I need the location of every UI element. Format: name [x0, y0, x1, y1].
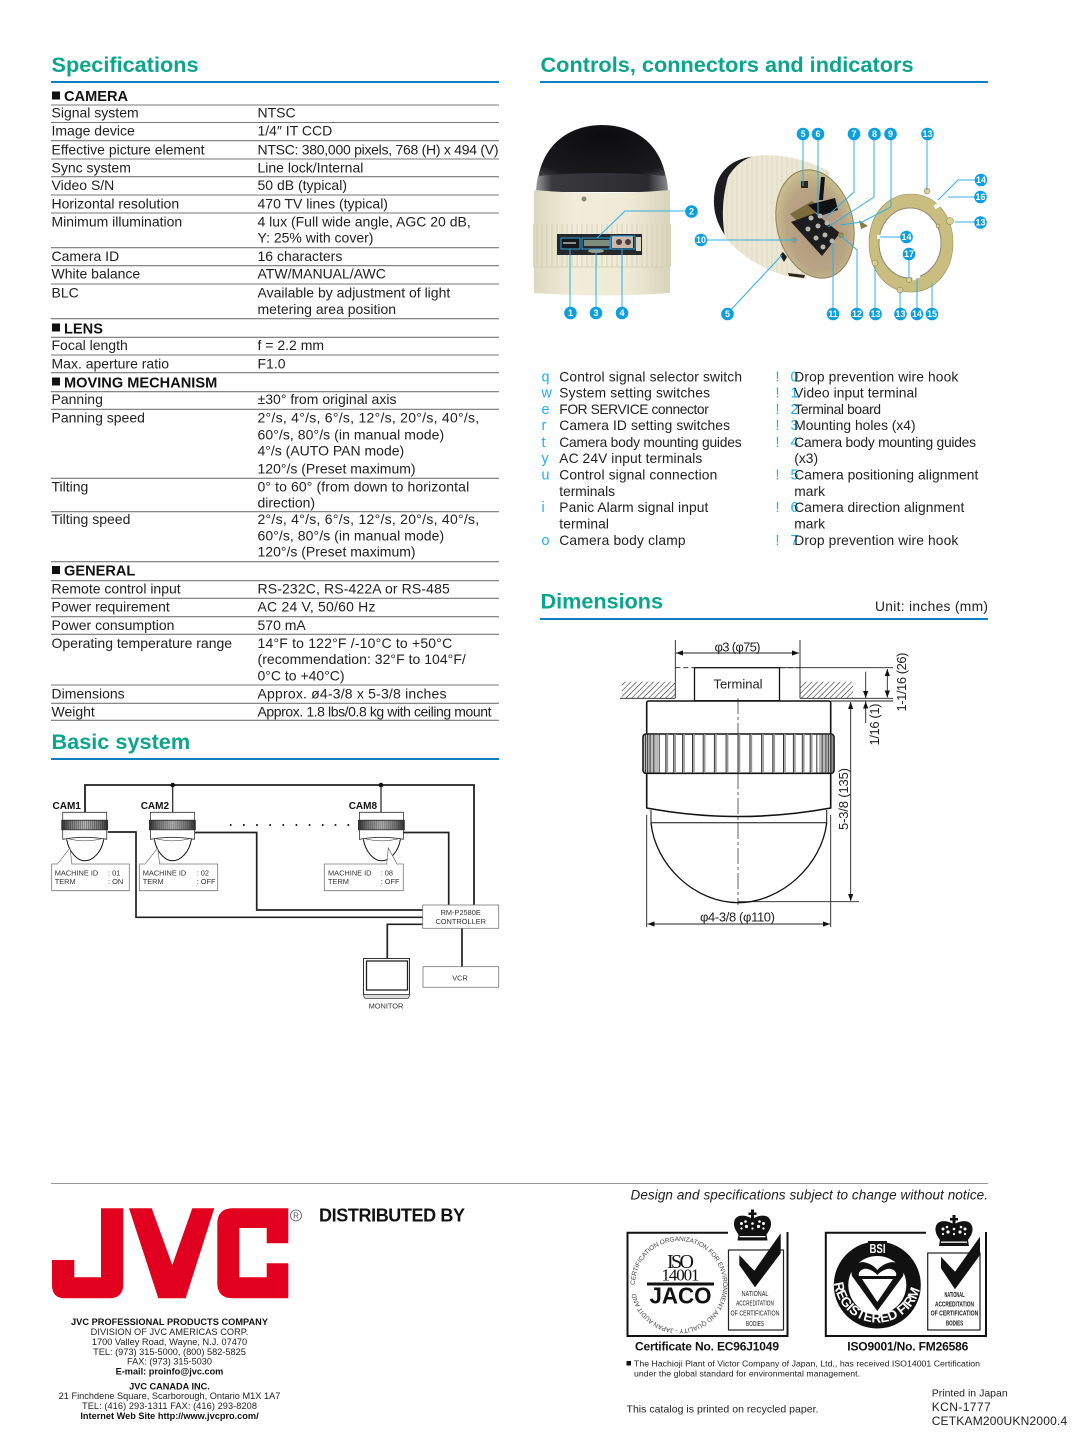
section: camera: metering area position	[258, 301, 396, 317]
section: moving mechanism: Tilting	[52, 479, 88, 495]
info box: camera 1 settings: TERM	[55, 877, 76, 886]
icon: camera 2: CAM2	[141, 801, 169, 812]
section: moving mechanism: 120°/s (Preset maximum)	[258, 544, 416, 560]
text: print codes: CETKAM200UKN2000.4	[932, 1414, 1068, 1428]
legend: right column: Drop prevention wire hook	[794, 533, 958, 548]
heading: Basic system: Basic system	[52, 729, 190, 754]
section: general: 14°F to 122°F /-10°C to +50°C	[258, 635, 452, 651]
badge: ISO 14001: ACCREDITATION	[736, 1300, 774, 1308]
text: addresses	[59, 1317, 280, 1421]
legend: right column: !	[776, 386, 779, 402]
legend: left column: u	[542, 468, 549, 484]
section: camera: 4 lux (Full wide angle, AGC 20 dB,	[258, 214, 471, 230]
legend: right column: mark	[794, 484, 825, 499]
legend: right column: Mounting holes (x4)	[794, 418, 916, 433]
section: camera	[52, 89, 498, 317]
controller box: CONTROLLER	[435, 917, 486, 926]
legend: right column: Video input terminal	[794, 386, 917, 401]
legend: right column: Camera positioning alignment	[794, 468, 978, 483]
section: general: Dimensions	[52, 686, 125, 702]
legend: right column: 0	[790, 370, 798, 386]
section: moving mechanism: Tilting speed	[52, 511, 130, 527]
legend: right column: !	[776, 435, 779, 451]
section: camera: White balance	[52, 265, 140, 281]
info box: camera 2 settings: : 02	[197, 868, 209, 877]
continuation dots	[230, 824, 349, 826]
info box: camera 8 settings: MACHINE ID	[328, 868, 372, 877]
dimension labels	[700, 640, 909, 925]
legend: left column: t	[542, 435, 546, 451]
legend: right column: !	[776, 533, 779, 549]
heading: Dimensions: Unit: inches (mm)	[875, 599, 988, 614]
center line	[737, 698, 739, 905]
info box: camera 2 settings: MACHINE ID	[143, 868, 186, 877]
numbered callouts: 7	[851, 129, 857, 139]
legend: right column: 1	[790, 386, 798, 402]
section: moving mechanism: ±30° from original axis	[258, 391, 396, 407]
legend: right column: 5	[790, 468, 798, 484]
section: camera: 1/4″ IT CCD	[258, 123, 332, 139]
text: certification note	[626, 1359, 980, 1379]
section: moving mechanism: Panning speed	[52, 410, 145, 426]
text: addresses: Internet Web Site http://www.jvcpro.com/	[80, 1411, 259, 1421]
section: general: 0°C to +40°C)	[258, 668, 345, 684]
numbered callouts: 14	[901, 232, 912, 242]
terminal box: Terminal	[713, 676, 763, 692]
vcr box	[423, 967, 499, 987]
heading: Specifications: Specifications	[52, 52, 199, 77]
legend: left column: terminals	[559, 484, 615, 499]
numbered callouts: 1	[568, 308, 573, 318]
numbered callouts: 8	[872, 129, 877, 139]
legend: left column: Camera ID setting switches	[559, 418, 730, 433]
caption: Certificate No. EC96J1049	[635, 1340, 779, 1354]
text: disclaimer: Design and specifications subject to change without notice.	[630, 1188, 988, 1202]
text: addresses: 1700 Valley Road, Wayne, N.J. 07470	[92, 1337, 247, 1347]
icon: monitor	[363, 958, 410, 1010]
legend: right column: 6	[790, 500, 798, 516]
section: camera: 16 characters	[258, 248, 342, 264]
badge: ISO 14001: 14001	[662, 1266, 700, 1284]
section: lens: F1.0	[258, 355, 286, 371]
legend: left column: r	[542, 418, 546, 434]
section: camera: ATW/MANUAL/AWC	[258, 265, 386, 281]
legend: left column: Control signal selector switch	[559, 370, 742, 385]
numbered callouts: 13	[975, 218, 986, 228]
section: general	[52, 564, 492, 720]
badge: ISO 14001: CERTIFICATION ORGANIZATION FOR ENVIRONMENT AND QUALITY - JAPAN AUDIT AND	[630, 1236, 728, 1334]
section: moving mechanism	[52, 375, 479, 560]
section: moving mechanism: Panning	[52, 391, 103, 407]
icon: camera 1	[52, 801, 108, 864]
legend: left column: System setting switches	[559, 386, 710, 401]
terminal box	[694, 668, 780, 701]
legend: right column: mark	[794, 517, 825, 532]
badge: ISO 14001: OF CERTIFICATION	[730, 1310, 780, 1318]
heading: Dimensions: Dimensions	[540, 588, 663, 614]
section: camera: Minimum illumination	[52, 214, 182, 230]
numbered callouts: 13	[895, 309, 906, 319]
legend: right column: 3	[790, 418, 798, 434]
ceiling hatching	[622, 682, 853, 698]
section: general: RS-232C, RS-422A or RS-485	[258, 580, 450, 596]
section: general: Approx. ø4-3/8 x 5-3/8 inches	[258, 686, 446, 702]
section: lens: Focal length	[52, 337, 128, 353]
text: print codes: Printed in Japan	[932, 1388, 1008, 1400]
section: general: (recommendation: 32°F to 104°F/	[258, 651, 466, 667]
text: addresses: 21 Finchdene Square, Scarborough, Ontario M1X 1A7	[59, 1391, 280, 1401]
numbered callouts: 10	[696, 235, 706, 245]
text: addresses: TEL: (416) 293-1311 FAX: (416) 293-8208	[82, 1401, 257, 1411]
section: camera: Image device	[52, 123, 135, 139]
icon: camera 8: CAM8	[349, 801, 377, 812]
section: camera: Y: 25% with cover)	[258, 230, 373, 246]
legend: left column: y	[542, 451, 550, 467]
section: camera: NTSC	[258, 104, 296, 120]
vcr box: VCR	[452, 974, 468, 982]
dimension labels: 1-1/16 (26)	[894, 652, 909, 712]
badge: ISO 14001: NATIONAL	[742, 1291, 768, 1298]
badge: BSI registered firm: ACCREDITATION	[935, 1302, 974, 1308]
legend: left column: Camera body clamp	[559, 533, 686, 548]
text: addresses: FAX: (973) 315-5030	[127, 1356, 212, 1366]
icon: camera 1: CAM1	[52, 801, 81, 812]
diagram: dimensions drawing	[620, 640, 909, 927]
numbered callouts: 5	[800, 129, 806, 139]
badge: BSI registered firm	[824, 1215, 987, 1354]
heading: Controls, connectors and indicators: Controls, connectors and indicators	[540, 52, 914, 77]
legend: right column: 4	[790, 435, 798, 451]
badge: BSI registered firm: OF CERTIFICATION	[931, 1310, 978, 1318]
info box: camera 2 settings	[139, 864, 218, 891]
legend: right column: Drop prevention wire hook	[794, 370, 958, 385]
controller box	[423, 905, 499, 928]
legend: right column: Camera direction alignment	[794, 500, 964, 515]
dimension labels: 5-3/8 (135)	[836, 768, 851, 830]
section: lens: LENS	[64, 321, 103, 337]
section: general: Power consumption	[52, 617, 174, 633]
dimension labels: 1/16 (1)	[867, 704, 882, 746]
badge: ISO 14001: ISO	[667, 1251, 694, 1273]
section: camera: Sync system	[52, 159, 131, 175]
section: camera: Available by adjustment of light	[258, 284, 450, 300]
section: camera: Horizontal resolution	[52, 195, 179, 211]
legend: right column: !	[776, 370, 779, 386]
section: general: AC 24 V, 50/60 Hz	[258, 599, 376, 615]
section: general: Operating temperature range	[52, 635, 232, 651]
section: lens	[52, 321, 324, 371]
badge: BSI registered firm: BODIES	[946, 1320, 963, 1328]
section: moving mechanism: 0° to 60° (from down to horizontal	[258, 479, 469, 495]
numbered callouts: 3	[593, 308, 599, 318]
legend: left column: AC 24V input terminals	[559, 451, 702, 466]
info box: camera 8 settings: : 08	[381, 868, 393, 877]
badge: ISO 14001: JACO	[650, 1282, 712, 1308]
section: camera: Effective picture element	[52, 141, 205, 157]
panel: specifications table	[51, 89, 499, 720]
section: camera: NTSC: 380,000 pixels, 768 (H) x 494 (V)	[258, 141, 498, 157]
wiring	[85, 785, 474, 967]
photo: mounting ring	[869, 188, 954, 293]
numbered callouts: 16	[975, 192, 986, 202]
legend: right column: Terminal board	[794, 402, 881, 417]
legend: left column: Panic Alarm signal input	[559, 500, 708, 515]
leader lines	[570, 134, 981, 314]
section: camera: BLC	[52, 284, 79, 300]
legend: left column: q	[542, 370, 550, 386]
legend: right column: !	[776, 468, 779, 484]
section: moving mechanism: direction)	[258, 495, 315, 511]
badge: BSI registered firm: NATIONAL	[944, 1292, 965, 1299]
camera outline	[643, 701, 834, 903]
legend: left column: o	[542, 533, 550, 549]
badge: BSI registered firm: REGISTERED FIRM	[834, 1282, 920, 1323]
section: moving mechanism: 60°/s, 80°/s (in manual mode)	[258, 426, 444, 442]
icon: camera 8	[349, 801, 404, 864]
text: print codes	[932, 1388, 1068, 1428]
text: addresses: DIVISION OF JVC AMERICAS CORP.	[91, 1327, 248, 1337]
legend: left column: Control signal connection	[559, 468, 717, 483]
photo: camera front	[533, 125, 671, 296]
numbered callouts: 12	[852, 309, 862, 319]
heading: Dimensions	[540, 588, 988, 620]
numbered callouts: 17	[904, 249, 914, 259]
numbered callouts	[564, 128, 987, 320]
legend: left column: e	[542, 402, 550, 418]
legend: right column: !	[776, 500, 779, 516]
section: moving mechanism: 60°/s, 80°/s (in manual mode)	[258, 528, 444, 544]
footer rule	[51, 1183, 988, 1184]
section: general: Power requirement	[52, 599, 170, 615]
numbered callouts: 14	[976, 175, 986, 185]
legend: right column: 7	[790, 533, 798, 549]
section: camera: Video S/N	[52, 177, 114, 193]
section: camera: Signal system	[52, 104, 139, 120]
legend: left column: w	[540, 386, 552, 402]
numbered callouts: 9	[888, 129, 893, 139]
section: lens: f = 2.2 mm	[258, 337, 324, 353]
section: camera: Line lock/Internal	[258, 159, 363, 175]
text: certification note: The Hachioji Plant of Victor Company of Japan, Ltd., has received ISO14001 Certification	[634, 1359, 980, 1369]
photo: camera rear	[714, 155, 868, 287]
text: distributed by: DISTRIBUTED BY	[319, 1206, 465, 1226]
numbered callouts: 6	[815, 129, 821, 139]
icon: monitor: MONITOR	[369, 1002, 403, 1010]
section: moving mechanism: 120°/s (Preset maximum)	[258, 460, 416, 476]
legend: right column: !	[776, 418, 779, 434]
section: moving mechanism: 2°/s, 4°/s, 6°/s, 12°/s, 20°/s, 40°/s,	[258, 410, 479, 426]
info box: camera 8 settings: TERM	[328, 877, 349, 886]
section: general: 570 mA	[258, 617, 306, 633]
controller box: RM-P2580E	[441, 908, 481, 917]
dimension labels: φ3 (φ75)	[714, 640, 760, 655]
legend: right column: 2	[790, 402, 798, 418]
section: camera: CAMERA	[64, 89, 129, 105]
caption: ISO9001/No. FM26586	[847, 1340, 969, 1354]
section: moving mechanism: MOVING MECHANISM	[64, 375, 217, 391]
info box: camera 8 settings: : OFF	[381, 877, 400, 886]
text: addresses: E-mail: proinfo@jvc.com	[116, 1366, 223, 1376]
badge: BSI registered firm: BSI	[870, 1241, 886, 1256]
text: addresses: JVC PROFESSIONAL PRODUCTS COMPANY	[71, 1317, 268, 1327]
section: camera: Camera ID	[52, 248, 119, 264]
legend: left column: terminal	[559, 517, 609, 532]
legend: left column: i	[542, 500, 545, 516]
text: recycled paper note: This catalog is printed on recycled paper.	[626, 1403, 818, 1415]
numbered callouts: 11	[828, 309, 838, 319]
legend: left column	[540, 370, 742, 549]
section: camera: 50 dB (typical)	[258, 177, 347, 193]
section: camera: 470 TV lines (typical)	[258, 195, 388, 211]
legend: right column: (x3)	[794, 451, 818, 466]
text: addresses: JVC CANADA INC.	[129, 1381, 210, 1391]
info box: camera 1 settings: : 01	[108, 868, 120, 877]
numbered callouts: 5	[725, 309, 730, 319]
section: general: Weight	[52, 704, 95, 720]
legend: left column: FOR SERVICE connector	[559, 402, 709, 417]
section: moving mechanism: 2°/s, 4°/s, 6°/s, 12°/s, 20°/s, 40°/s,	[258, 511, 479, 527]
numbered callouts: 14	[912, 309, 922, 319]
section: general: GENERAL	[64, 564, 135, 580]
numbered callouts: 4	[619, 308, 625, 318]
info box: camera 1 settings: MACHINE ID	[55, 868, 98, 877]
text: addresses: TEL: (973) 315-5000, (800) 582-5825	[93, 1347, 246, 1357]
section: general: Remote control input	[52, 580, 181, 596]
section: moving mechanism: 4°/s (AUTO PAN mode)	[258, 443, 404, 459]
dimension labels: φ4-3/8 (φ110)	[700, 910, 775, 925]
section: lens: Max. aperture ratio	[52, 355, 169, 371]
legend: right column	[776, 370, 978, 549]
text: certification note: under the global standard for environmental management.	[634, 1369, 860, 1379]
legend: right column: !	[776, 402, 779, 418]
info box: camera 2 settings: : OFF	[197, 877, 216, 886]
badge: ISO 14001	[626, 1210, 788, 1354]
numbered callouts: 13	[870, 309, 881, 319]
legend: right column: Camera body mounting guides	[794, 435, 976, 450]
numbered callouts: 2	[689, 207, 694, 217]
legend: left column: Camera body mounting guides	[559, 435, 742, 450]
info box: camera 1 settings: : ON	[108, 877, 123, 886]
text: print codes: KCN-1777	[932, 1400, 991, 1414]
info box: camera 8 settings	[324, 864, 403, 891]
section: general: Approx. 1.8 lbs/0.8 kg with ceiling mount	[258, 704, 492, 720]
diagram: basic system wiring	[52, 783, 499, 1010]
info box: camera 2 settings: TERM	[143, 877, 164, 886]
numbered callouts: 13	[922, 129, 933, 139]
numbered callouts: 15	[927, 309, 937, 319]
icon: camera 2	[141, 801, 195, 864]
logo: JVC	[52, 1208, 302, 1298]
logo: JVC: R	[293, 1212, 299, 1220]
badge: ISO 14001: BODIES	[746, 1321, 764, 1328]
info box: camera 1 settings	[52, 864, 129, 891]
